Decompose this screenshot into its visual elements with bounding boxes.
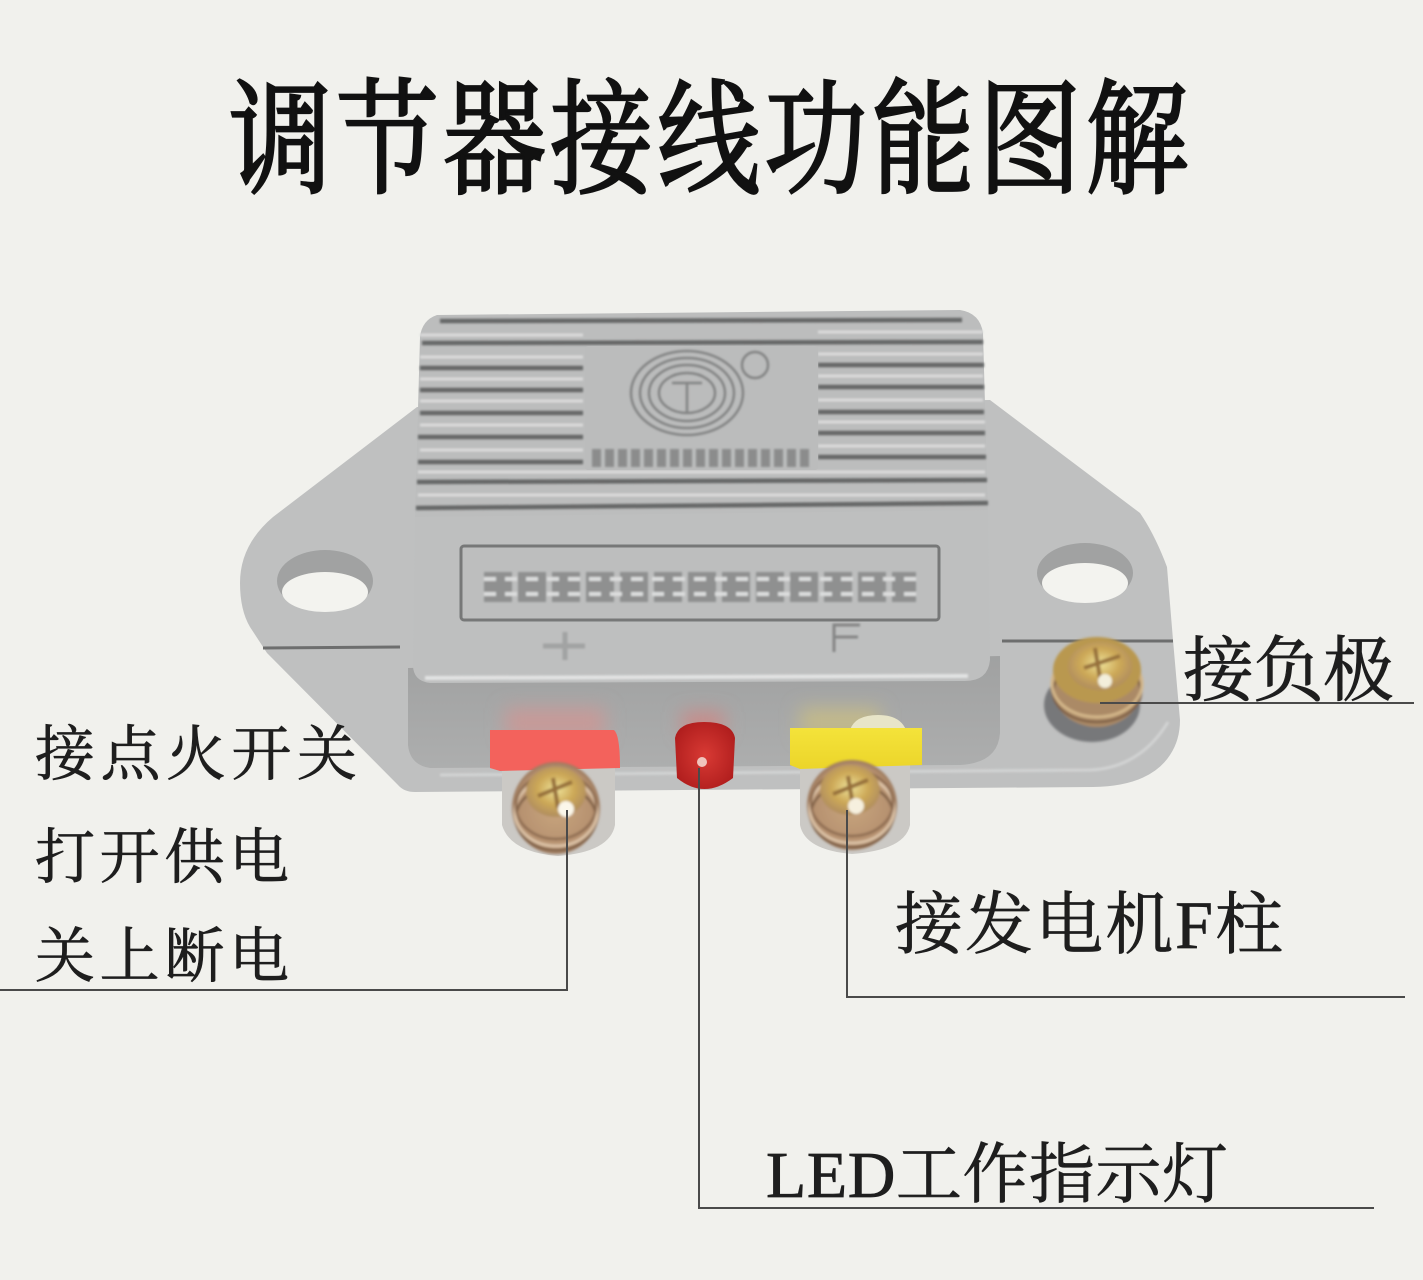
fin grooves (416, 320, 988, 508)
embossed nameplate lettering (484, 579, 916, 594)
front face of housing (408, 510, 1000, 768)
callout: ignition switch (0, 722, 567, 990)
callout: generator F post: 接发电机F柱 (895, 887, 1283, 963)
callout: LED indicator (699, 768, 1374, 1212)
left mounting hole (277, 550, 373, 612)
right mounting hole (1037, 543, 1133, 603)
right metal tab (800, 765, 910, 854)
left screw (512, 762, 600, 854)
title: 调节器接线功能图解 (229, 72, 1193, 210)
embossed small label (592, 449, 812, 467)
ground screw (1044, 637, 1143, 742)
F mark (834, 625, 860, 652)
regulator device (240, 310, 1180, 856)
plate rim highlight (440, 722, 1168, 775)
logo emblem (631, 351, 768, 435)
coloured glow above terminals (505, 708, 880, 738)
left metal tab (502, 768, 615, 856)
finned top of housing (415, 310, 988, 517)
mounting plate (240, 400, 1180, 792)
callout: ignition switch: 接点火开关 (35, 722, 357, 788)
fin highlights (418, 332, 985, 495)
embossed nameplate (461, 546, 939, 620)
plus mark (543, 632, 585, 660)
plate grooves (263, 641, 1173, 648)
central logo panel (585, 346, 818, 470)
LED indicator (675, 722, 735, 789)
callout: LED indicator: LED工作指示灯 (766, 1139, 1228, 1212)
yellow terminal (790, 715, 922, 769)
callout: generator F post (847, 810, 1405, 997)
callout: negative terminal: 接负极 (1183, 633, 1394, 711)
callout: ignition switch: 打开供电 (35, 825, 289, 891)
middle screw (807, 760, 897, 850)
red terminal (490, 730, 620, 771)
callout: ignition switch: 关上断电 (35, 924, 289, 990)
